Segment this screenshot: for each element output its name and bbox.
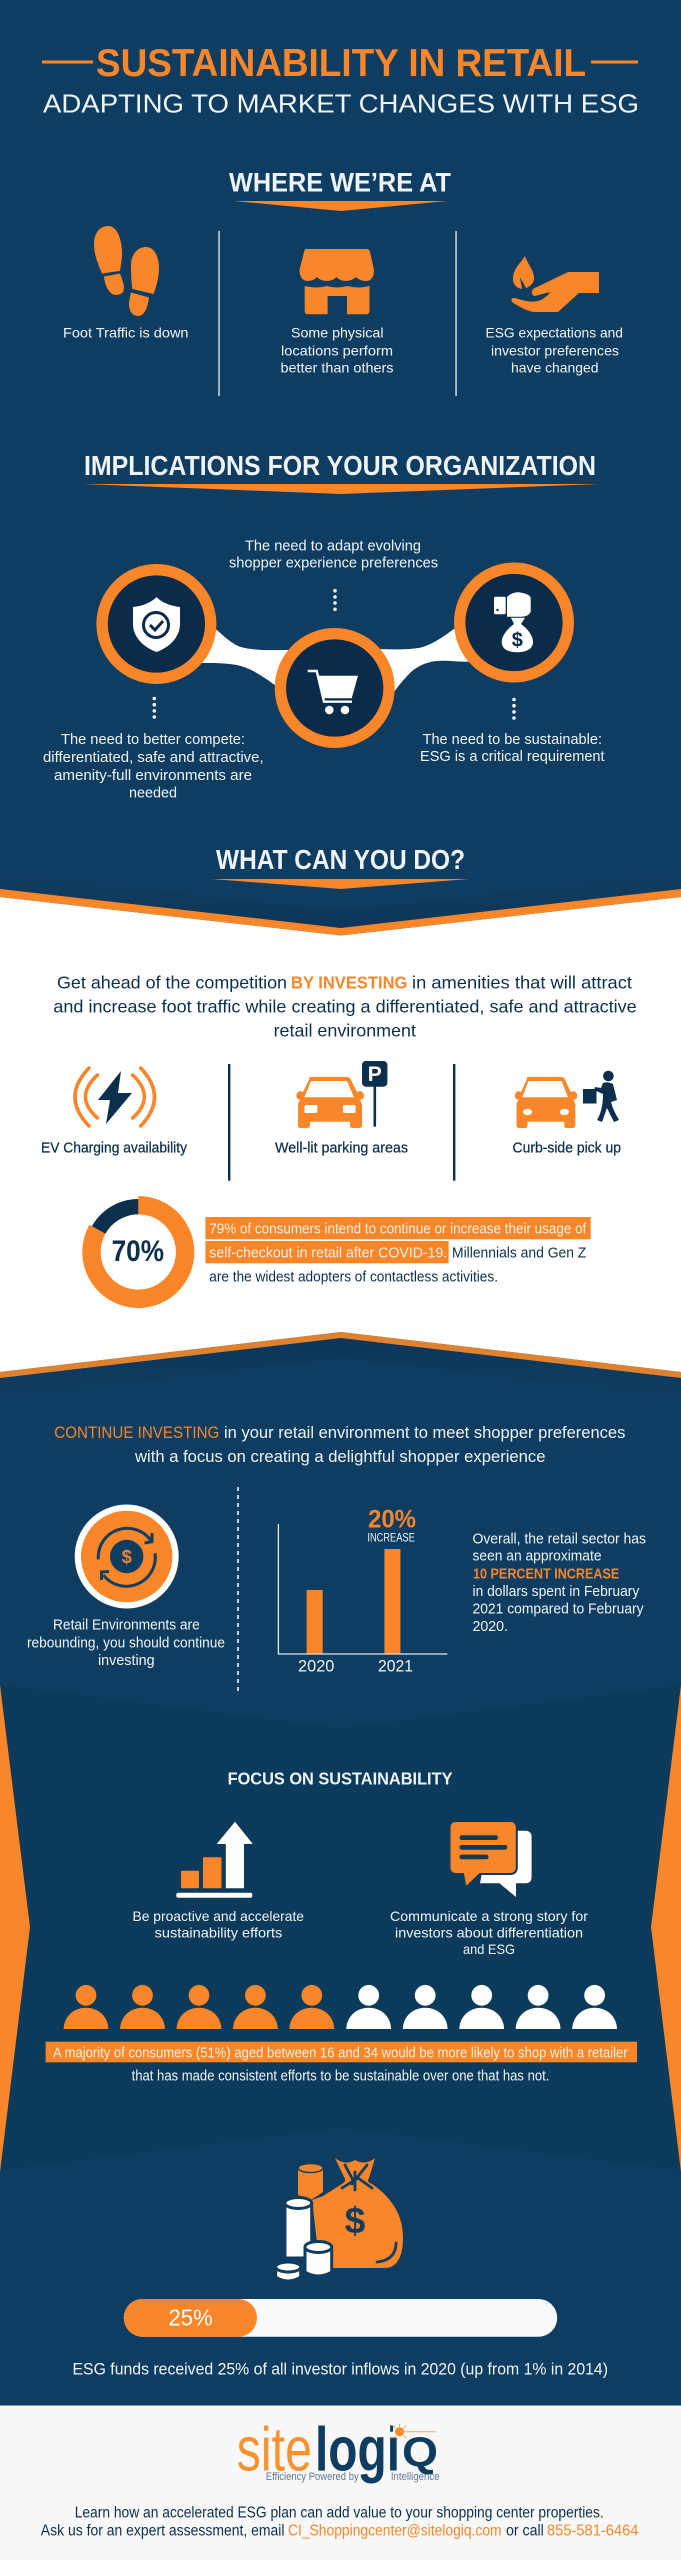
logo: Q [402, 2428, 438, 2476]
text: get ahead: in amenities that will attract [412, 972, 632, 992]
heading: what can you do [212, 844, 469, 889]
text: compete: needed [129, 785, 177, 802]
icon row: people [64, 1985, 617, 2029]
callout: majority of consumers [46, 2042, 637, 2085]
icon: shield circle [102, 570, 211, 678]
icon: parking: P [368, 1063, 382, 1086]
text: foot traffic: Foot Traffic is down [63, 325, 188, 341]
text: continue investing [54, 1423, 625, 1466]
text: overall [472, 1531, 646, 1635]
text: physical locations: better than others [280, 360, 394, 376]
text: adapt: shopper experience preferences [229, 555, 438, 572]
progress bar [124, 2299, 557, 2337]
icon: money bag and coins: $ [345, 2200, 366, 2241]
text: proactive: sustainability efforts [155, 1925, 282, 1941]
icon: rebound circle [75, 1504, 179, 1608]
text: overall: in dollars spent in February [472, 1584, 640, 1600]
text: overall: 2020. [472, 1619, 508, 1635]
icon: parking [296, 1061, 387, 1128]
text: call to action: CI_Shoppingcenter@sitelogiq.com [288, 2522, 502, 2539]
text: overall: seen an approximate [472, 1549, 602, 1565]
panel: footer [41, 2416, 639, 2539]
text: esg expectations [486, 325, 623, 376]
progress bar: 25% [168, 2305, 213, 2331]
text: sustainable: ESG is a critical requirement [420, 748, 605, 765]
title: ADAPTING TO MARKET CHANGES WITH ESG [43, 89, 639, 119]
text: communicate [390, 1908, 588, 1957]
callout: consumers: self-checkout in retail after COVID-19. [209, 1245, 447, 1261]
icon: hand with leaf [511, 256, 599, 312]
bar chart: 2020 [298, 1657, 334, 1676]
logo: site [237, 2416, 312, 2484]
text: rebounding: Retail Environments are [53, 1617, 200, 1633]
text: compete [43, 731, 264, 802]
text: continue investing: CONTINUE INVESTING [54, 1423, 219, 1442]
callout: consumers: are the widest adopters of contactless activities. [209, 1270, 498, 1286]
heading: implications: IMPLICATIONS FOR YOUR ORGANIZATION [84, 450, 596, 481]
text: rebounding: investing [98, 1653, 155, 1669]
panel: implications diagram [43, 538, 605, 802]
text: continue investing: in your retail environment to meet shopper preferences [224, 1423, 625, 1442]
orange side wedge left [0, 1685, 30, 2172]
heading: where we're at: WHERE WE’RE AT [229, 168, 451, 198]
text: overall: Overall, the retail sector has [472, 1531, 646, 1547]
text: physical locations [280, 325, 394, 376]
panel: focus on sustainability [46, 1768, 637, 2085]
text: sustainable [420, 731, 605, 765]
text: call to action: or call [506, 2522, 544, 2539]
donut chart: 70% [112, 1235, 164, 1268]
text: communicate: Communicate a strong story for [390, 1908, 588, 1924]
text: physical locations: locations perform [281, 342, 393, 358]
bar chart: 2021 [378, 1657, 413, 1676]
darker sustainability band [0, 1685, 681, 2170]
text: overall: 2021 compared to February [472, 1602, 644, 1618]
text: get ahead: retail environment [274, 1021, 416, 1041]
text: esg expectations: investor preferences [491, 342, 619, 358]
callout: majority of consumers: that has made consistent efforts to be sustainable over one that has not. [132, 2069, 549, 2085]
logo [237, 2416, 440, 2484]
text: compete: amenity-full environments are [54, 767, 252, 784]
title: SUSTAINABILITY IN RETAIL [96, 42, 586, 85]
callout: consumers: Millennials and Gen Z [452, 1245, 586, 1261]
text: physical locations: Some physical [291, 325, 384, 341]
text: call to action: 855-581-6464 [547, 2522, 639, 2539]
text: get ahead: BY INVESTING [291, 972, 407, 992]
text: communicate: and ESG [463, 1941, 515, 1957]
label: ev charging: EV Charging availability [41, 1141, 188, 1157]
heading: where we're at [229, 168, 451, 211]
orange side wedge right [651, 1685, 681, 2172]
bar chart [278, 1506, 447, 1676]
text: call to action: Learn how an accelerated ESG plan can add value to your shopping center properties. [75, 2505, 604, 2522]
icon: money circle: $ [512, 630, 523, 652]
logo: Intelligence [391, 2471, 440, 2483]
text: get ahead: Get ahead of the competition [57, 972, 287, 992]
text: esg expectations: have changed [511, 360, 598, 376]
icon: store [300, 249, 374, 314]
icon: money bag and coins [276, 2158, 403, 2281]
dots: top [333, 589, 337, 611]
text: adapt: The need to adapt evolving [245, 538, 421, 555]
text: overall: 10 PERCENT INCREASE [473, 1566, 620, 1582]
shading below white section [0, 1338, 681, 1398]
text: adapt [229, 538, 438, 572]
callout: consumers [205, 1217, 591, 1286]
text: rebounding [27, 1617, 225, 1669]
callout: majority of consumers: A majority of consumers (51%) aged between 16 and 34 would be more likely to shop with a retailer [53, 2046, 628, 2062]
heading: implications [82, 450, 600, 494]
text: call to action [41, 2505, 639, 2539]
donut chart [82, 1196, 194, 1308]
label: parking: Well-lit parking areas [275, 1141, 408, 1157]
icon: money circle [460, 568, 568, 677]
shading above white section [0, 872, 681, 928]
icon: footprints [94, 226, 159, 316]
orange band bottom [0, 1332, 681, 1378]
footer background [0, 2406, 681, 2560]
text: compete: The need to better compete: [61, 731, 245, 748]
panel: what can you do [41, 972, 637, 1308]
text: compete: differentiated, safe and attractive, [43, 749, 264, 766]
connectors [198, 626, 470, 695]
white section background [0, 897, 681, 1372]
panel: esg funds [72, 2158, 608, 2378]
heading: focus: FOCUS ON SUSTAINABILITY [228, 1768, 453, 1788]
panel: where we're at [63, 226, 623, 396]
icon: growth arrow [176, 1822, 253, 1898]
text: get ahead [53, 972, 637, 1041]
text: continue investing: with a focus on creating a delightful shopper experience [134, 1447, 545, 1466]
icon: cart circle [280, 634, 389, 742]
logo: Efficiency Powered by [266, 2471, 359, 2483]
callout: consumers: 79% of consumers intend to continue or increase their usage of [209, 1221, 587, 1237]
icon: rebound circle: $ [122, 1547, 132, 1567]
logo: logi [315, 2416, 400, 2484]
orange band top [0, 889, 681, 936]
icon: chat bubbles [450, 1821, 532, 1897]
label: curb-side: Curb-side pick up [512, 1141, 621, 1157]
text: call to action: Ask us for an expert assessment, email [41, 2522, 284, 2539]
text: sustainable: The need to be sustainable: [423, 731, 602, 748]
icon: ev charging [75, 1068, 154, 1126]
text: get ahead: and increase foot traffic while creating a differentiated, safe and attractive [53, 996, 637, 1016]
dots: right [512, 698, 516, 720]
text: communicate: investors about differentiation [395, 1925, 583, 1941]
bar chart: INCREASE [367, 1533, 415, 1545]
title [42, 42, 639, 119]
text: proactive: Be proactive and accelerate [132, 1908, 304, 1924]
text: esg expectations: ESG expectations and [486, 325, 623, 341]
icon: curb-side [515, 1071, 619, 1128]
panel: continue investing [27, 1423, 646, 1693]
bar chart: 20% [368, 1506, 416, 1534]
dots: left [152, 697, 156, 719]
text: esg funds: ESG funds received 25% of all investor inflows in 2020 (up from 1% in 2014) [72, 2359, 608, 2378]
heading: what can you do: WHAT CAN YOU DO? [216, 844, 465, 875]
text: rebounding: rebounding, you should continue [27, 1635, 225, 1651]
text: proactive [132, 1908, 304, 1941]
